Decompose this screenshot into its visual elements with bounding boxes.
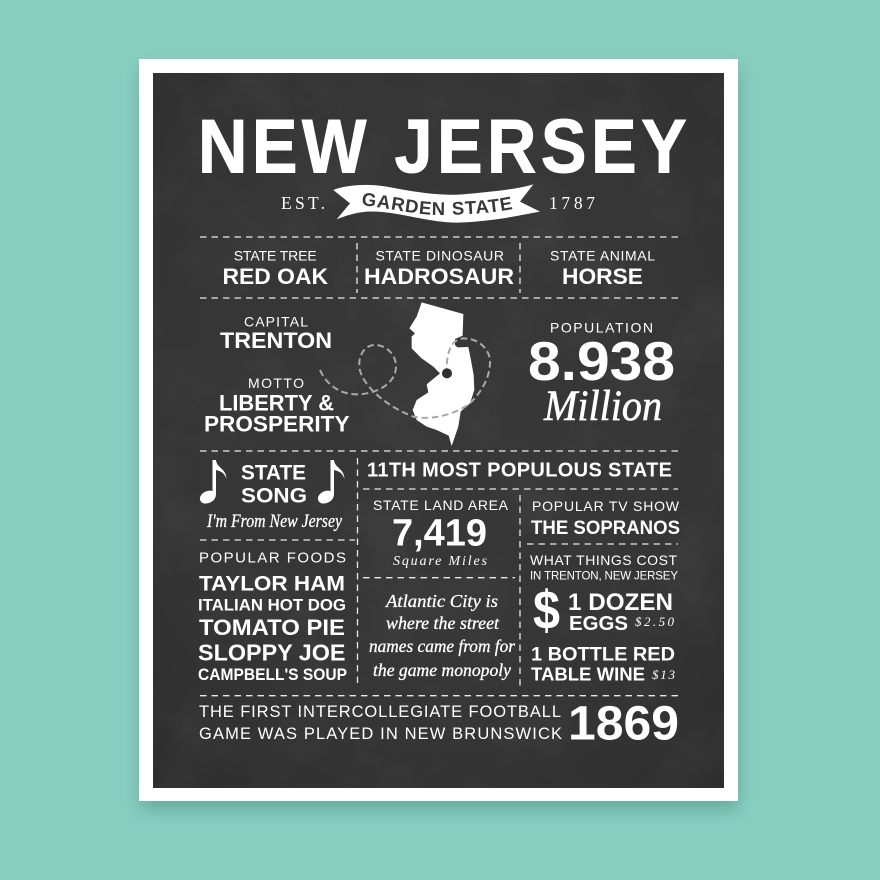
- state animal: STATE ANIMAL: [550, 248, 655, 264]
- population: [528, 320, 675, 430]
- football fact: THE FIRST INTERCOLLEGIATE FOOTBALL: [199, 703, 561, 721]
- popular foods: [198, 550, 347, 684]
- Atlantic City fact: [369, 591, 516, 680]
- population: 8.938: [528, 330, 675, 392]
- popular foods: TOMATO PIE: [199, 615, 345, 640]
- popular foods: POPULAR FOODS: [199, 550, 346, 567]
- icon: music note right: [318, 460, 344, 504]
- banner: Garden State: [334, 184, 540, 223]
- what things cost: 1 DOZEN: [568, 589, 673, 616]
- motto: [204, 375, 350, 437]
- state land area: STATE LAND AREA: [373, 497, 509, 513]
- what things cost: [530, 552, 678, 685]
- chalkboard panel: [153, 73, 724, 788]
- dashed route: [320, 338, 490, 418]
- state land area: Square Miles: [393, 554, 488, 569]
- state animal: [550, 248, 655, 289]
- football fact: GAME WAS PLAYED IN NEW BRUNSWICK: [199, 725, 562, 743]
- Atlantic City fact: names came from for: [369, 636, 516, 656]
- what things cost: $13: [652, 667, 676, 682]
- state song: [200, 460, 344, 532]
- popular foods: TAYLOR HAM: [199, 572, 345, 596]
- established label: EST.: [281, 193, 325, 213]
- icon: dollar sign: $: [533, 579, 560, 641]
- map: New Jersey with route to Trenton: [320, 302, 490, 446]
- icon: music note left: [200, 460, 226, 504]
- poster frame: [139, 59, 738, 801]
- state dinosaur: [364, 248, 514, 289]
- popular foods: ITALIAN HOT DOG: [198, 596, 346, 615]
- state land area: 7,419: [392, 513, 487, 555]
- motto: MOTTO: [248, 375, 304, 391]
- what things cost: TABLE WINE: [531, 664, 645, 685]
- population: Million: [543, 383, 662, 430]
- Atlantic City fact: Atlantic City is: [385, 591, 498, 611]
- state tree: RED OAK: [222, 264, 328, 289]
- state song: I'm From New Jersey: [206, 511, 342, 532]
- football fact: [199, 698, 679, 750]
- what things cost: WHAT THINGS COST: [530, 552, 677, 568]
- Atlantic City fact: where the street: [386, 613, 500, 633]
- capital: CAPITAL: [244, 314, 308, 330]
- state dinosaur: STATE DINOSAUR: [376, 248, 504, 264]
- Trenton marker: [442, 368, 452, 378]
- football fact: 1869: [568, 698, 679, 750]
- banner: Garden State: GARDEN STATE: [362, 193, 512, 216]
- popular TV show: POPULAR TV SHOW: [532, 498, 680, 514]
- population: POPULATION: [550, 320, 653, 336]
- motto: PROSPERITY: [204, 412, 350, 437]
- what things cost: IN TRENTON, NEW JERSEY: [530, 570, 678, 582]
- popular TV show: THE SOPRANOS: [531, 518, 680, 539]
- state tree: STATE TREE: [234, 248, 317, 264]
- capital: [220, 314, 332, 353]
- most populous fact: 11TH MOST POPULOUS STATE: [367, 460, 672, 482]
- state silhouette: [409, 302, 474, 446]
- popular TV show: [531, 498, 680, 539]
- state song: STATE: [241, 461, 306, 484]
- motto: LIBERTY &: [219, 391, 334, 416]
- popular foods: CAMPBELL'S SOUP: [198, 666, 347, 684]
- state dinosaur: HADROSAUR: [364, 264, 514, 289]
- state tree: [222, 248, 328, 289]
- state song: SONG: [241, 485, 307, 508]
- established year: 1787: [549, 193, 595, 213]
- popular foods: SLOPPY JOE: [198, 640, 346, 666]
- what things cost: 1 BOTTLE RED: [531, 644, 675, 666]
- Atlantic City fact: the game monopoly: [373, 660, 511, 680]
- capital: TRENTON: [220, 328, 332, 353]
- state animal: HORSE: [562, 264, 643, 289]
- what things cost: EGGS: [569, 613, 628, 635]
- state land area: [373, 497, 509, 569]
- what things cost: $2.50: [635, 614, 674, 629]
- title: NEW JERSEY: [198, 105, 687, 189]
